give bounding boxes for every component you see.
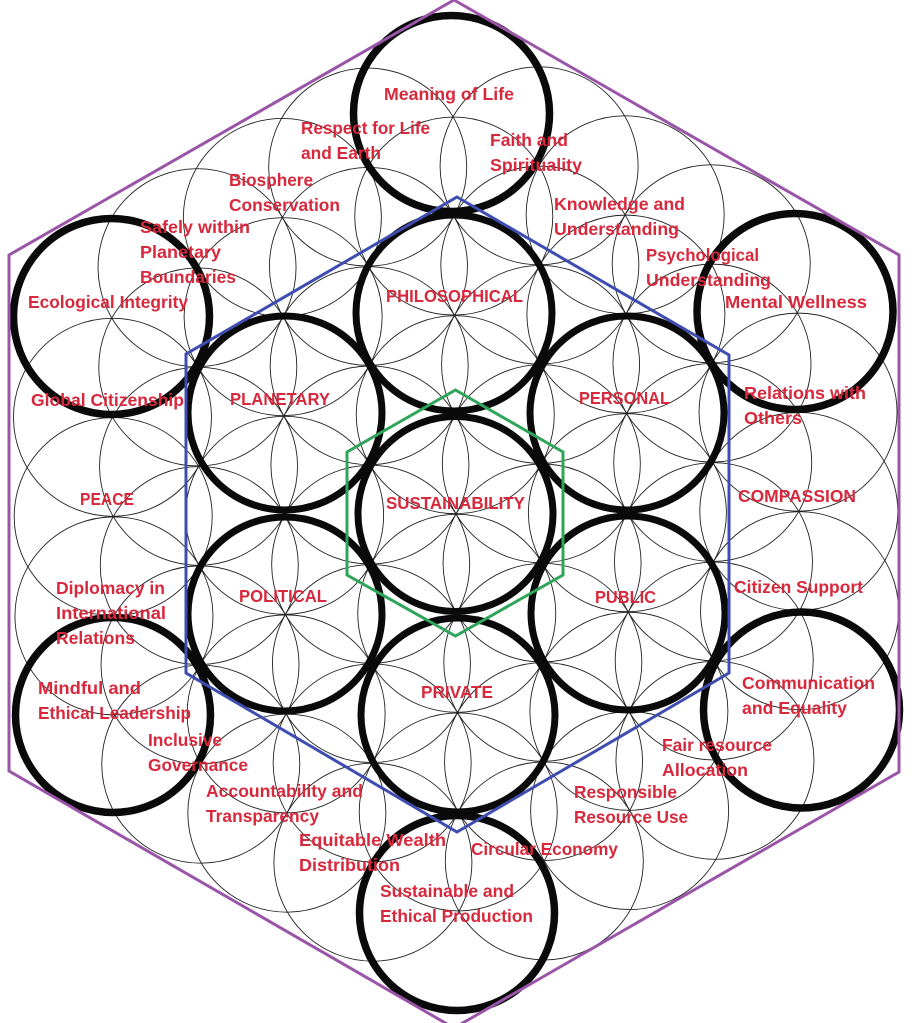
label: Safely within Planetary Boundaries: Planetary: [140, 242, 221, 262]
label: Sustainable and Ethical Production: [380, 881, 533, 926]
label: Safely within Planetary Boundaries: Safely within: [140, 217, 250, 237]
label: Respect for Life and Earth: and Earth: [301, 143, 381, 163]
label: Relations with Others: Others: [744, 408, 802, 428]
label: Fair resource Allocation: Fair resource: [662, 735, 772, 755]
label: Mindful and Ethical Leadership: [38, 678, 191, 723]
label: Responsible Resource Use: Responsible: [574, 782, 677, 802]
label: Responsible Resource Use: [574, 782, 688, 827]
label: Biosphere Conservation: [229, 170, 340, 215]
label: Sustainable and Ethical Production: Ethical Production: [380, 906, 533, 926]
label: Psychological Understanding: Understanding: [646, 270, 771, 290]
label: Psychological Understanding: [646, 245, 771, 290]
label: Knowledge and Understanding: Knowledge and: [554, 194, 685, 214]
label: Equitable Wealth Distribution: Distribution: [299, 855, 400, 875]
label: Communication and Equality: Communication: [742, 673, 875, 693]
label: Faith and Spirituality: Spirituality: [490, 155, 582, 175]
label: Relations with Others: [744, 383, 866, 428]
label: Communication and Equality: [742, 673, 875, 718]
label: Inclusive Governance: Governance: [148, 755, 248, 775]
label: Biosphere Conservation: Conservation: [229, 195, 340, 215]
label: Diplomacy in International Relations: International: [56, 603, 166, 623]
label: Faith and Spirituality: Faith and: [490, 130, 568, 150]
label: POLITICAL: POLITICAL: [239, 586, 327, 606]
label: Diplomacy in International Relations: Diplomacy in: [56, 578, 165, 598]
label: Safely within Planetary Boundaries: [140, 217, 250, 287]
label: Knowledge and Understanding: [554, 194, 685, 239]
label: PEACE: PEACE: [80, 489, 134, 509]
label: Equitable Wealth Distribution: Equitable Wealth: [299, 830, 446, 850]
label: Responsible Resource Use: Resource Use: [574, 807, 688, 827]
label: PHILOSOPHICAL: PHILOSOPHICAL: [386, 286, 523, 306]
label: Citizen Support: Citizen Support: [734, 577, 863, 597]
label: SUSTAINABILITY: SUSTAINABILITY: [386, 493, 525, 513]
label: Communication and Equality: and Equality: [742, 698, 847, 718]
label: PRIVATE: PRIVATE: [421, 682, 493, 702]
label: PLANETARY: PLANETARY: [230, 389, 330, 409]
label: Meaning of Life: Meaning of Life: [384, 84, 514, 104]
label: Mindful and Ethical Leadership: Mindful and: [38, 678, 141, 698]
label: Mindful and Ethical Leadership: Ethical Leadership: [38, 703, 191, 723]
label: Inclusive Governance: Inclusive: [148, 730, 222, 750]
inner green hexagon: [347, 390, 563, 636]
label: PUBLIC: PUBLIC: [595, 587, 656, 607]
label: Relations with Others: Relations with: [744, 383, 866, 403]
label: Faith and Spirituality: [490, 130, 582, 175]
label: Inclusive Governance: [148, 730, 248, 775]
label: Respect for Life and Earth: Respect for Life: [301, 118, 430, 138]
label: Safely within Planetary Boundaries: Boundaries: [140, 267, 236, 287]
label: Fair resource Allocation: [662, 735, 772, 780]
label: Knowledge and Understanding: Understanding: [554, 219, 679, 239]
label: Psychological Understanding: Psychological: [646, 245, 759, 265]
label: Global Citizenship: Global Citizenship: [31, 390, 184, 410]
label: Equitable Wealth Distribution: [299, 830, 446, 875]
label: Diplomacy in International Relations: [56, 578, 166, 648]
label: Accountability and Transparency: Accountability and: [206, 781, 363, 801]
label: COMPASSION: COMPASSION: [738, 486, 856, 506]
label: Fair resource Allocation: Allocation: [662, 760, 748, 780]
label: PERSONAL: PERSONAL: [579, 388, 670, 408]
label: Ecological Integrity: Ecological Integrity: [28, 292, 188, 312]
label: Respect for Life and Earth: [301, 118, 430, 163]
label: Accountability and Transparency: [206, 781, 363, 826]
label: Mental Wellness: Mental Wellness: [725, 292, 867, 312]
middle blue hexagon: [186, 197, 729, 832]
label: Circular Economy: Circular Economy: [471, 839, 618, 859]
thick circles: inner seven: [188, 215, 725, 812]
label: Biosphere Conservation: Biosphere: [229, 170, 313, 190]
label: Sustainable and Ethical Production: Sustainable and: [380, 881, 514, 901]
label: Accountability and Transparency: Transparency: [206, 806, 319, 826]
label: Diplomacy in International Relations: Relations: [56, 628, 135, 648]
